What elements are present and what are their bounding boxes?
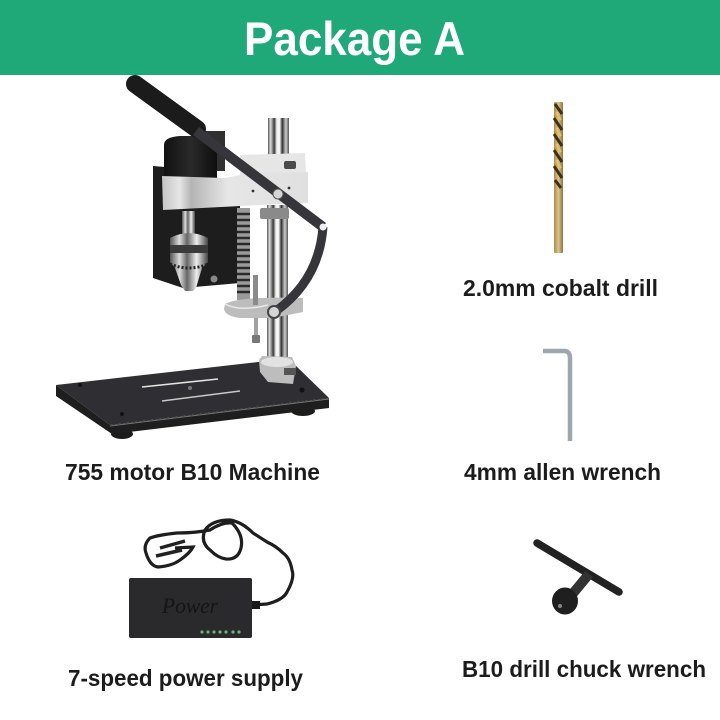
top of carriage	[205, 131, 225, 171]
silver bracket	[162, 172, 308, 210]
label: power supply: 7-speed power supply	[68, 665, 303, 691]
column clamp	[259, 356, 296, 384]
label: chuck wrench: B10 drill chuck wrench	[462, 656, 706, 682]
lead screw	[237, 208, 250, 300]
label: drill: 2.0mm cobalt drill	[463, 275, 658, 301]
chuck	[170, 211, 218, 291]
icon: power supply: Power	[161, 593, 218, 618]
motor	[164, 136, 217, 182]
header banner	[0, 0, 720, 75]
icon: power supply	[129, 520, 293, 638]
base plate	[56, 362, 329, 439]
column	[260, 118, 289, 360]
back plate	[153, 166, 240, 288]
icon: cobalt drill bit	[554, 102, 563, 253]
icon: allen wrench	[543, 351, 570, 441]
title: Package A	[244, 12, 465, 65]
feed wheel	[224, 275, 303, 343]
icon: chuck wrench	[537, 543, 619, 614]
drill press machine	[56, 84, 329, 439]
top block	[240, 153, 306, 176]
label: machine: 755 motor B10 Machine	[65, 459, 320, 485]
lever arm and handle	[135, 84, 326, 318]
label: allen wrench: 4mm allen wrench	[464, 459, 661, 485]
